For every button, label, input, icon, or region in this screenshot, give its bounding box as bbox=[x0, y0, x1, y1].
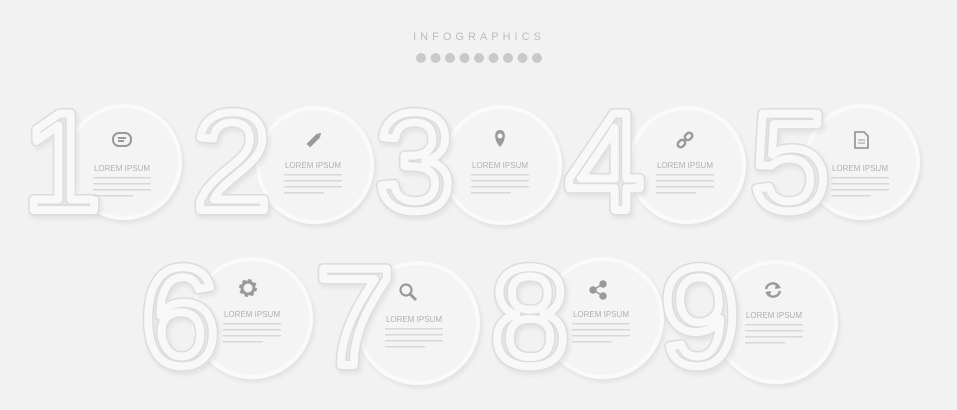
item 4 bbox=[566, 83, 744, 240]
item 8 bbox=[491, 238, 662, 395]
item 2 bbox=[193, 83, 372, 240]
item 6: LOREM IPSUM bbox=[224, 310, 280, 319]
item 5: LOREM IPSUM bbox=[832, 164, 888, 173]
item 5: 5 bbox=[751, 83, 829, 240]
item 4: 4 bbox=[566, 83, 644, 240]
title: INFOGRAPHICS bbox=[413, 31, 545, 43]
item 6: 6 bbox=[141, 238, 219, 395]
item 7: 7 bbox=[316, 238, 394, 395]
item 2: 2 bbox=[193, 83, 271, 240]
item 7 bbox=[316, 238, 478, 395]
item 7: 7 bbox=[316, 238, 394, 395]
item 2: 2 bbox=[193, 83, 271, 240]
item 9: 9 bbox=[661, 238, 739, 395]
item 1: 1 bbox=[23, 83, 101, 240]
item 9: 9 bbox=[661, 238, 739, 395]
item 5 bbox=[751, 83, 918, 240]
item 1: 1 bbox=[23, 83, 101, 240]
item 6 bbox=[141, 238, 311, 395]
item 9: LOREM IPSUM bbox=[746, 311, 802, 320]
item 5: 5 bbox=[751, 83, 829, 240]
item 3: 3 bbox=[376, 83, 454, 240]
item 8: 8 bbox=[491, 238, 569, 395]
item 8: 8 bbox=[491, 238, 569, 395]
dots bbox=[416, 53, 542, 63]
item 2: LOREM IPSUM bbox=[285, 161, 341, 170]
item 1 bbox=[23, 83, 180, 240]
item 8: LOREM IPSUM bbox=[573, 310, 629, 319]
item 9 bbox=[661, 238, 836, 395]
item 1: LOREM IPSUM bbox=[94, 164, 150, 173]
item 6: 6 bbox=[141, 238, 219, 395]
item 4: 4 bbox=[566, 83, 644, 240]
item 7: LOREM IPSUM bbox=[386, 315, 442, 324]
item 3 bbox=[376, 83, 560, 240]
item 3: LOREM IPSUM bbox=[472, 161, 528, 170]
item 4: LOREM IPSUM bbox=[657, 161, 713, 170]
item 3: 3 bbox=[376, 83, 454, 240]
